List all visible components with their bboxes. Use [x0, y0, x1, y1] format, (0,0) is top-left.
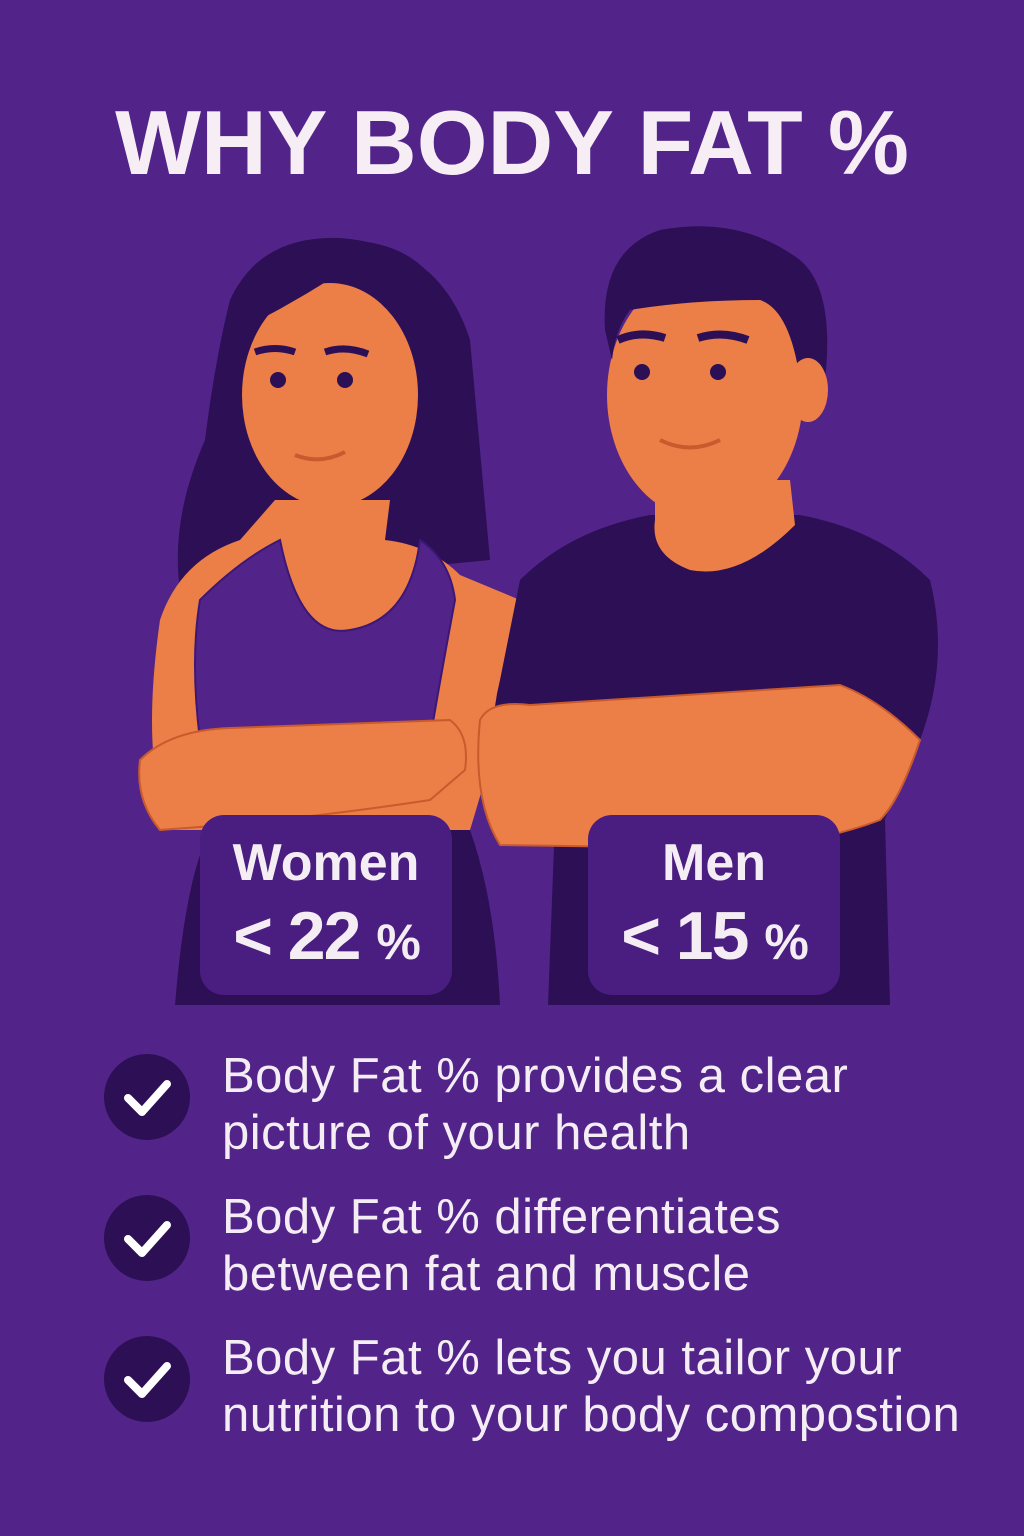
benefit 1 — [104, 1049, 848, 1160]
benefit 2: between fat and muscle — [222, 1247, 751, 1301]
illustration: woman and man — [138, 226, 938, 1005]
benefit 3: Body Fat % lets you tailor your — [222, 1331, 902, 1385]
man — [478, 226, 938, 1005]
benefit 3: nutrition to your body compostion — [222, 1388, 960, 1442]
label: men: Men — [662, 834, 766, 892]
benefit 2: Body Fat % differentiates — [222, 1190, 781, 1244]
label: men: < 15 % — [621, 898, 807, 974]
benefit 1: Body Fat % provides a clear — [222, 1049, 848, 1103]
woman — [139, 238, 520, 1005]
benefit 1: picture of your health — [222, 1106, 691, 1160]
label: women: Women — [233, 834, 419, 892]
benefit 3 — [104, 1331, 960, 1442]
benefit 2 — [104, 1190, 781, 1301]
title: WHY BODY FAT % — [115, 93, 909, 194]
label: men — [588, 815, 840, 995]
label: women — [200, 815, 452, 995]
label: women: < 22 % — [233, 898, 419, 974]
